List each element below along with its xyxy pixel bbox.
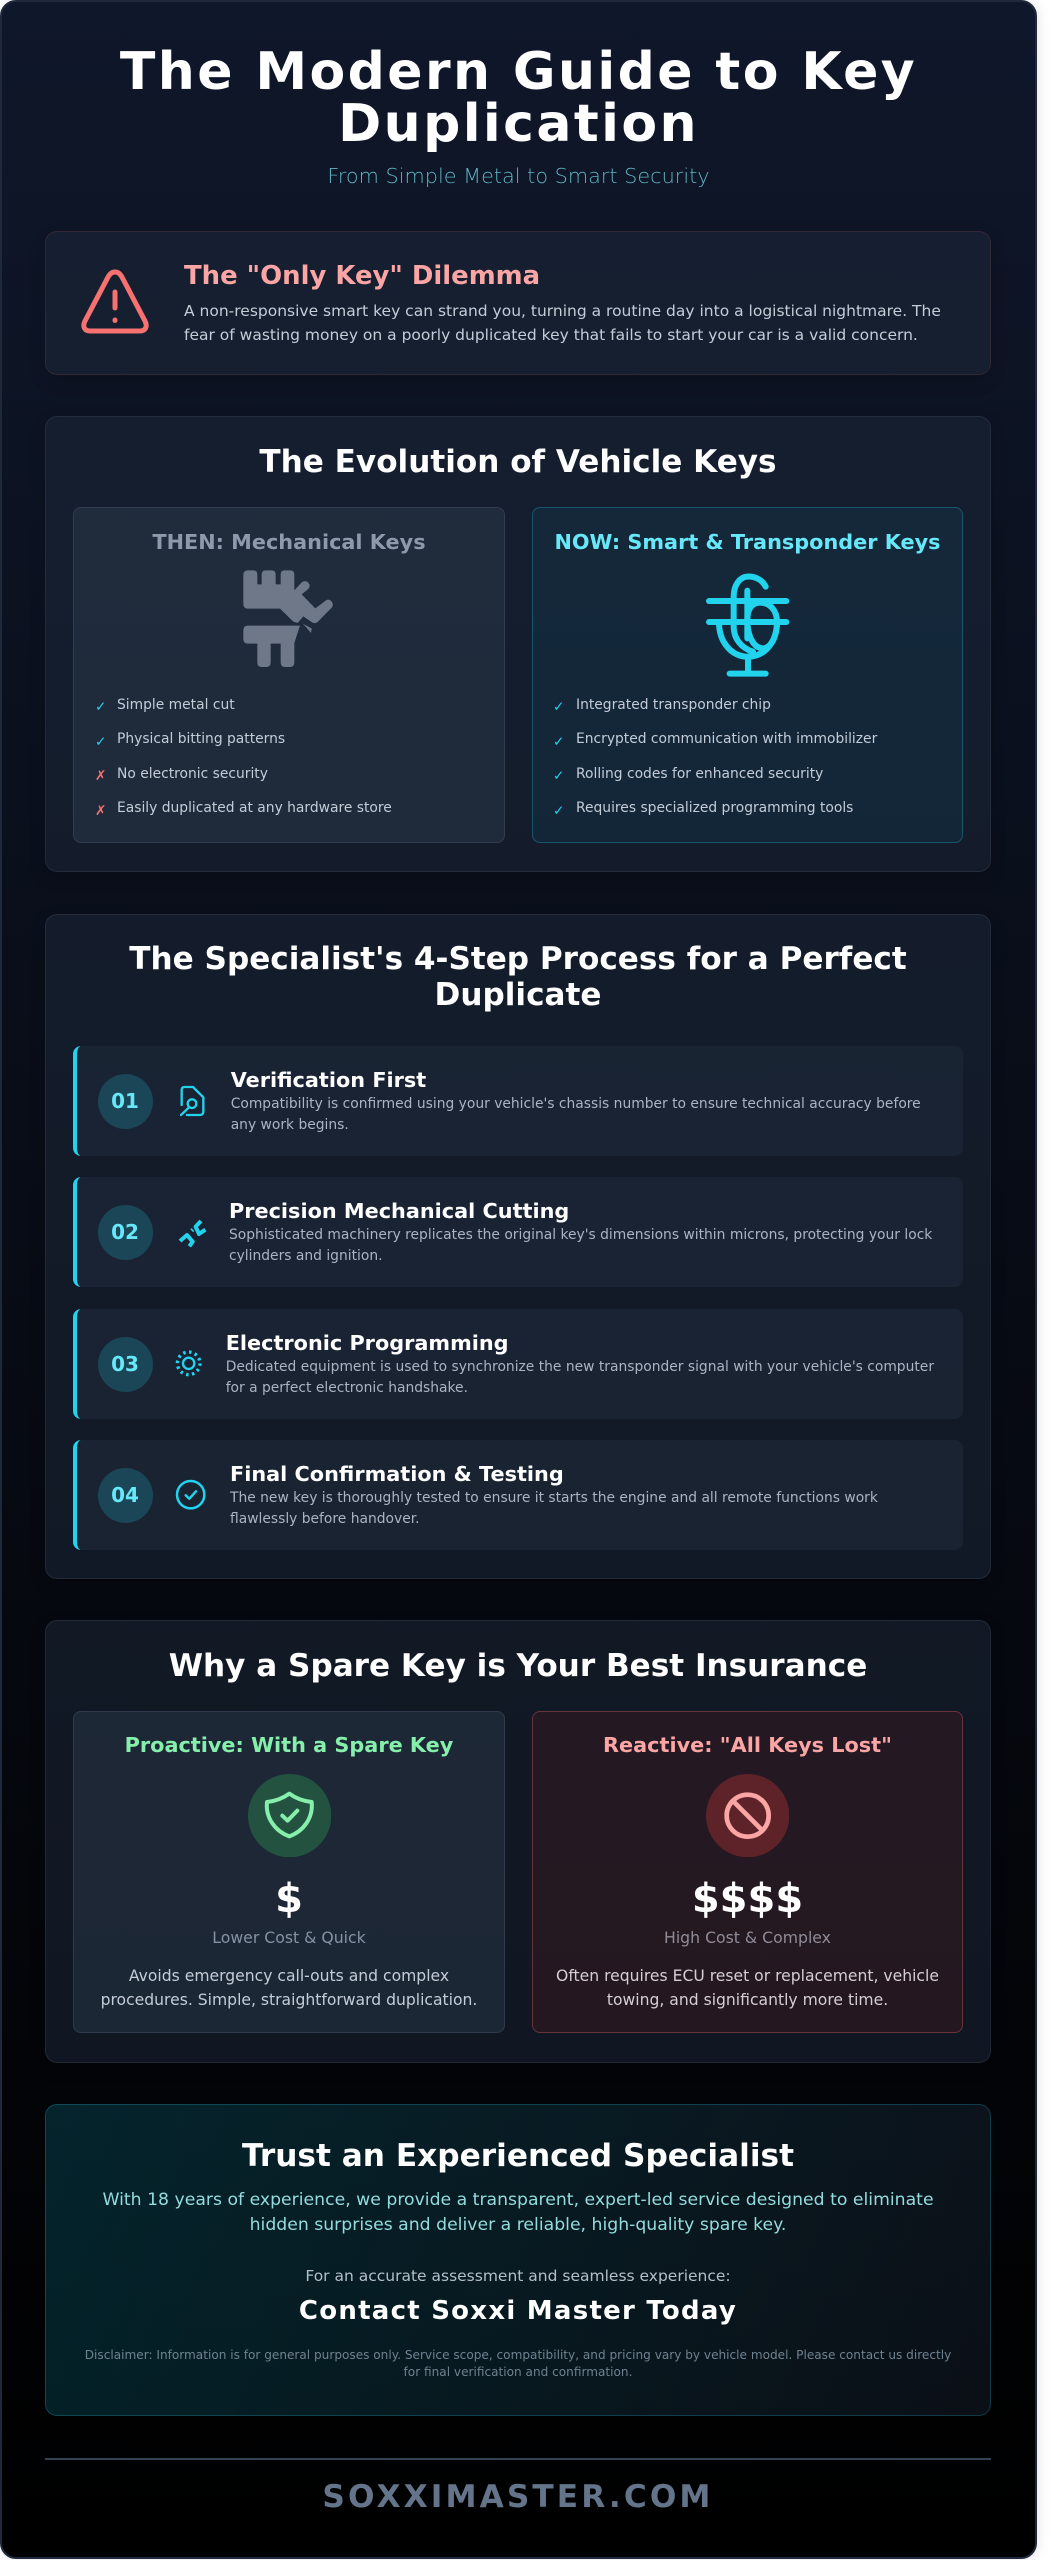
contact prompt: For an accurate assessment and seamless experience: — [305, 2267, 731, 2285]
card title: NOW: Smart & Transponder Keys — [554, 530, 941, 554]
step description — [231, 1096, 921, 1132]
disclaimer — [85, 2348, 951, 2379]
panel: reactive — [532, 1711, 963, 2033]
step description: Compatibility is confirmed using your vehicle's chassis number to ensure technical accuracy before — [231, 1096, 921, 1112]
description: Avoids emergency call-outs and complex — [129, 1967, 449, 1985]
description: With 18 years of experience, we provide a transparent, expert-led service designed to eliminate — [102, 2190, 934, 2210]
list text: Rolling codes for enhanced security — [576, 766, 823, 782]
panel: then mechanical keys — [73, 507, 505, 843]
step description: Sophisticated machinery replicates the original key's dimensions within microns, protecting your lock — [229, 1226, 932, 1242]
icon: ban circle — [706, 1774, 789, 1857]
icon: gear chip — [176, 1350, 202, 1376]
list item: ✗ — [95, 803, 106, 819]
list text: Integrated transponder chip — [576, 696, 771, 712]
list text: No electronic security — [117, 766, 268, 782]
heading: Why a Spare Key is Your Best Insurance — [169, 1648, 867, 1684]
step description: The new key is thoroughly tested to ensure it starts the engine and all remote functions work — [230, 1490, 878, 1506]
step description: Dedicated equipment is used to synchronize the new transponder signal with your vehicle's computer — [226, 1358, 934, 1374]
icon: broken mechanical key — [243, 570, 333, 667]
panel: now smart keys — [532, 507, 963, 843]
step number — [98, 1074, 152, 1128]
step description: cylinders and ignition. — [229, 1248, 382, 1264]
list text: Physical bitting patterns — [117, 731, 285, 747]
description — [102, 2190, 934, 2235]
step description: any work begins. — [231, 1116, 349, 1132]
description: A non-responsive smart key can strand you, turning a routine day into a logistical nightmare. The — [184, 302, 941, 320]
description — [101, 1967, 477, 2009]
step description — [230, 1490, 878, 1526]
step title: Verification First — [231, 1068, 426, 1092]
step number: 01 — [111, 1088, 139, 1112]
description: Often requires ECU reset or replacement, vehicle — [556, 1967, 939, 1985]
disclaimer: for final verification and confirmation. — [404, 2365, 632, 2379]
subtitle: From Simple Metal to Smart Security — [327, 164, 710, 188]
card title: THEN: Mechanical Keys — [152, 530, 426, 554]
icon: warning triangle — [81, 270, 149, 334]
step description — [229, 1226, 932, 1264]
description: towing, and significantly more time. — [607, 1991, 888, 2009]
description: procedures. Simple, straightforward duplication. — [101, 1991, 477, 2009]
step description: flawlessly before handover. — [230, 1510, 420, 1526]
icon: document search — [180, 1086, 204, 1116]
panel: spare key insurance — [45, 1620, 991, 2063]
step number — [98, 1468, 152, 1522]
icon: shield check — [248, 1774, 331, 1857]
price: $$$$ — [692, 1876, 803, 1922]
step 03 — [73, 1309, 963, 1419]
heading: The Specialist's 4-Step Process for a Perfect — [129, 941, 907, 977]
list item: ✓ — [553, 768, 564, 784]
icon: precision tools — [178, 1220, 206, 1248]
price: $ — [275, 1876, 303, 1922]
list item: ✗ — [95, 768, 106, 784]
panel: evolution of vehicle keys — [45, 416, 991, 872]
list item: ✓ — [553, 734, 564, 750]
step description: for a perfect electronic handshake. — [226, 1380, 468, 1396]
step number: 03 — [111, 1352, 139, 1376]
description — [556, 1967, 939, 2009]
panel: proactive — [73, 1711, 505, 2033]
card title: Reactive: "All Keys Lost" — [603, 1733, 892, 1757]
contact call: Contact Soxxi Master Today — [299, 2296, 737, 2326]
list item: ✓ — [95, 734, 106, 750]
header — [120, 42, 917, 188]
list text: Encrypted communication with immobilizer — [576, 731, 877, 747]
title — [120, 42, 917, 154]
list item: ✓ — [95, 699, 106, 715]
price label: Lower Cost & Quick — [212, 1928, 366, 1947]
panel: call to action — [45, 2104, 991, 2416]
step 01 — [73, 1046, 963, 1156]
icon: smart key microphone — [706, 574, 790, 677]
step number — [98, 1204, 152, 1260]
description: hidden surprises and deliver a reliable, high-quality spare key. — [250, 2215, 786, 2235]
heading — [129, 941, 907, 1013]
list text: Easily duplicated at any hardware store — [117, 800, 392, 816]
heading: Trust an Experienced Specialist — [242, 2138, 794, 2174]
step title: Electronic Programming — [226, 1331, 509, 1355]
step title: Final Confirmation & Testing — [230, 1462, 564, 1486]
title: The Modern Guide to Key — [120, 42, 917, 102]
step number — [98, 1336, 152, 1392]
list text: Simple metal cut — [117, 696, 235, 712]
description — [184, 302, 941, 344]
heading: The "Only Key" Dilemma — [184, 261, 540, 291]
heading: The Evolution of Vehicle Keys — [259, 444, 777, 480]
list item: ✓ — [553, 699, 564, 715]
description: fear of wasting money on a poorly duplicated key that fails to start your car is a valid concern. — [184, 326, 918, 344]
step 02 — [73, 1177, 963, 1287]
step description — [226, 1358, 934, 1396]
step 04 — [73, 1440, 963, 1550]
website: SOXXIMASTER.COM — [322, 2479, 714, 2515]
price label: High Cost & Complex — [664, 1928, 831, 1947]
list item: ✓ — [553, 803, 564, 819]
heading: Duplicate — [435, 977, 601, 1013]
panel: four-step process — [45, 914, 991, 1579]
step number: 04 — [111, 1482, 139, 1506]
icon: check circle — [176, 1480, 206, 1510]
footer — [45, 2458, 991, 2518]
list text: Requires specialized programming tools — [576, 800, 853, 816]
title: Duplication — [338, 94, 699, 154]
disclaimer: Disclaimer: Information is for general purposes only. Service scope, compatibility, and pricing vary by vehicle model. Please contact us directly — [85, 2348, 951, 2362]
step number: 02 — [111, 1220, 139, 1244]
card title: Proactive: With a Spare Key — [125, 1733, 453, 1757]
panel: only key dilemma — [45, 231, 991, 375]
step title: Precision Mechanical Cutting — [229, 1199, 569, 1223]
